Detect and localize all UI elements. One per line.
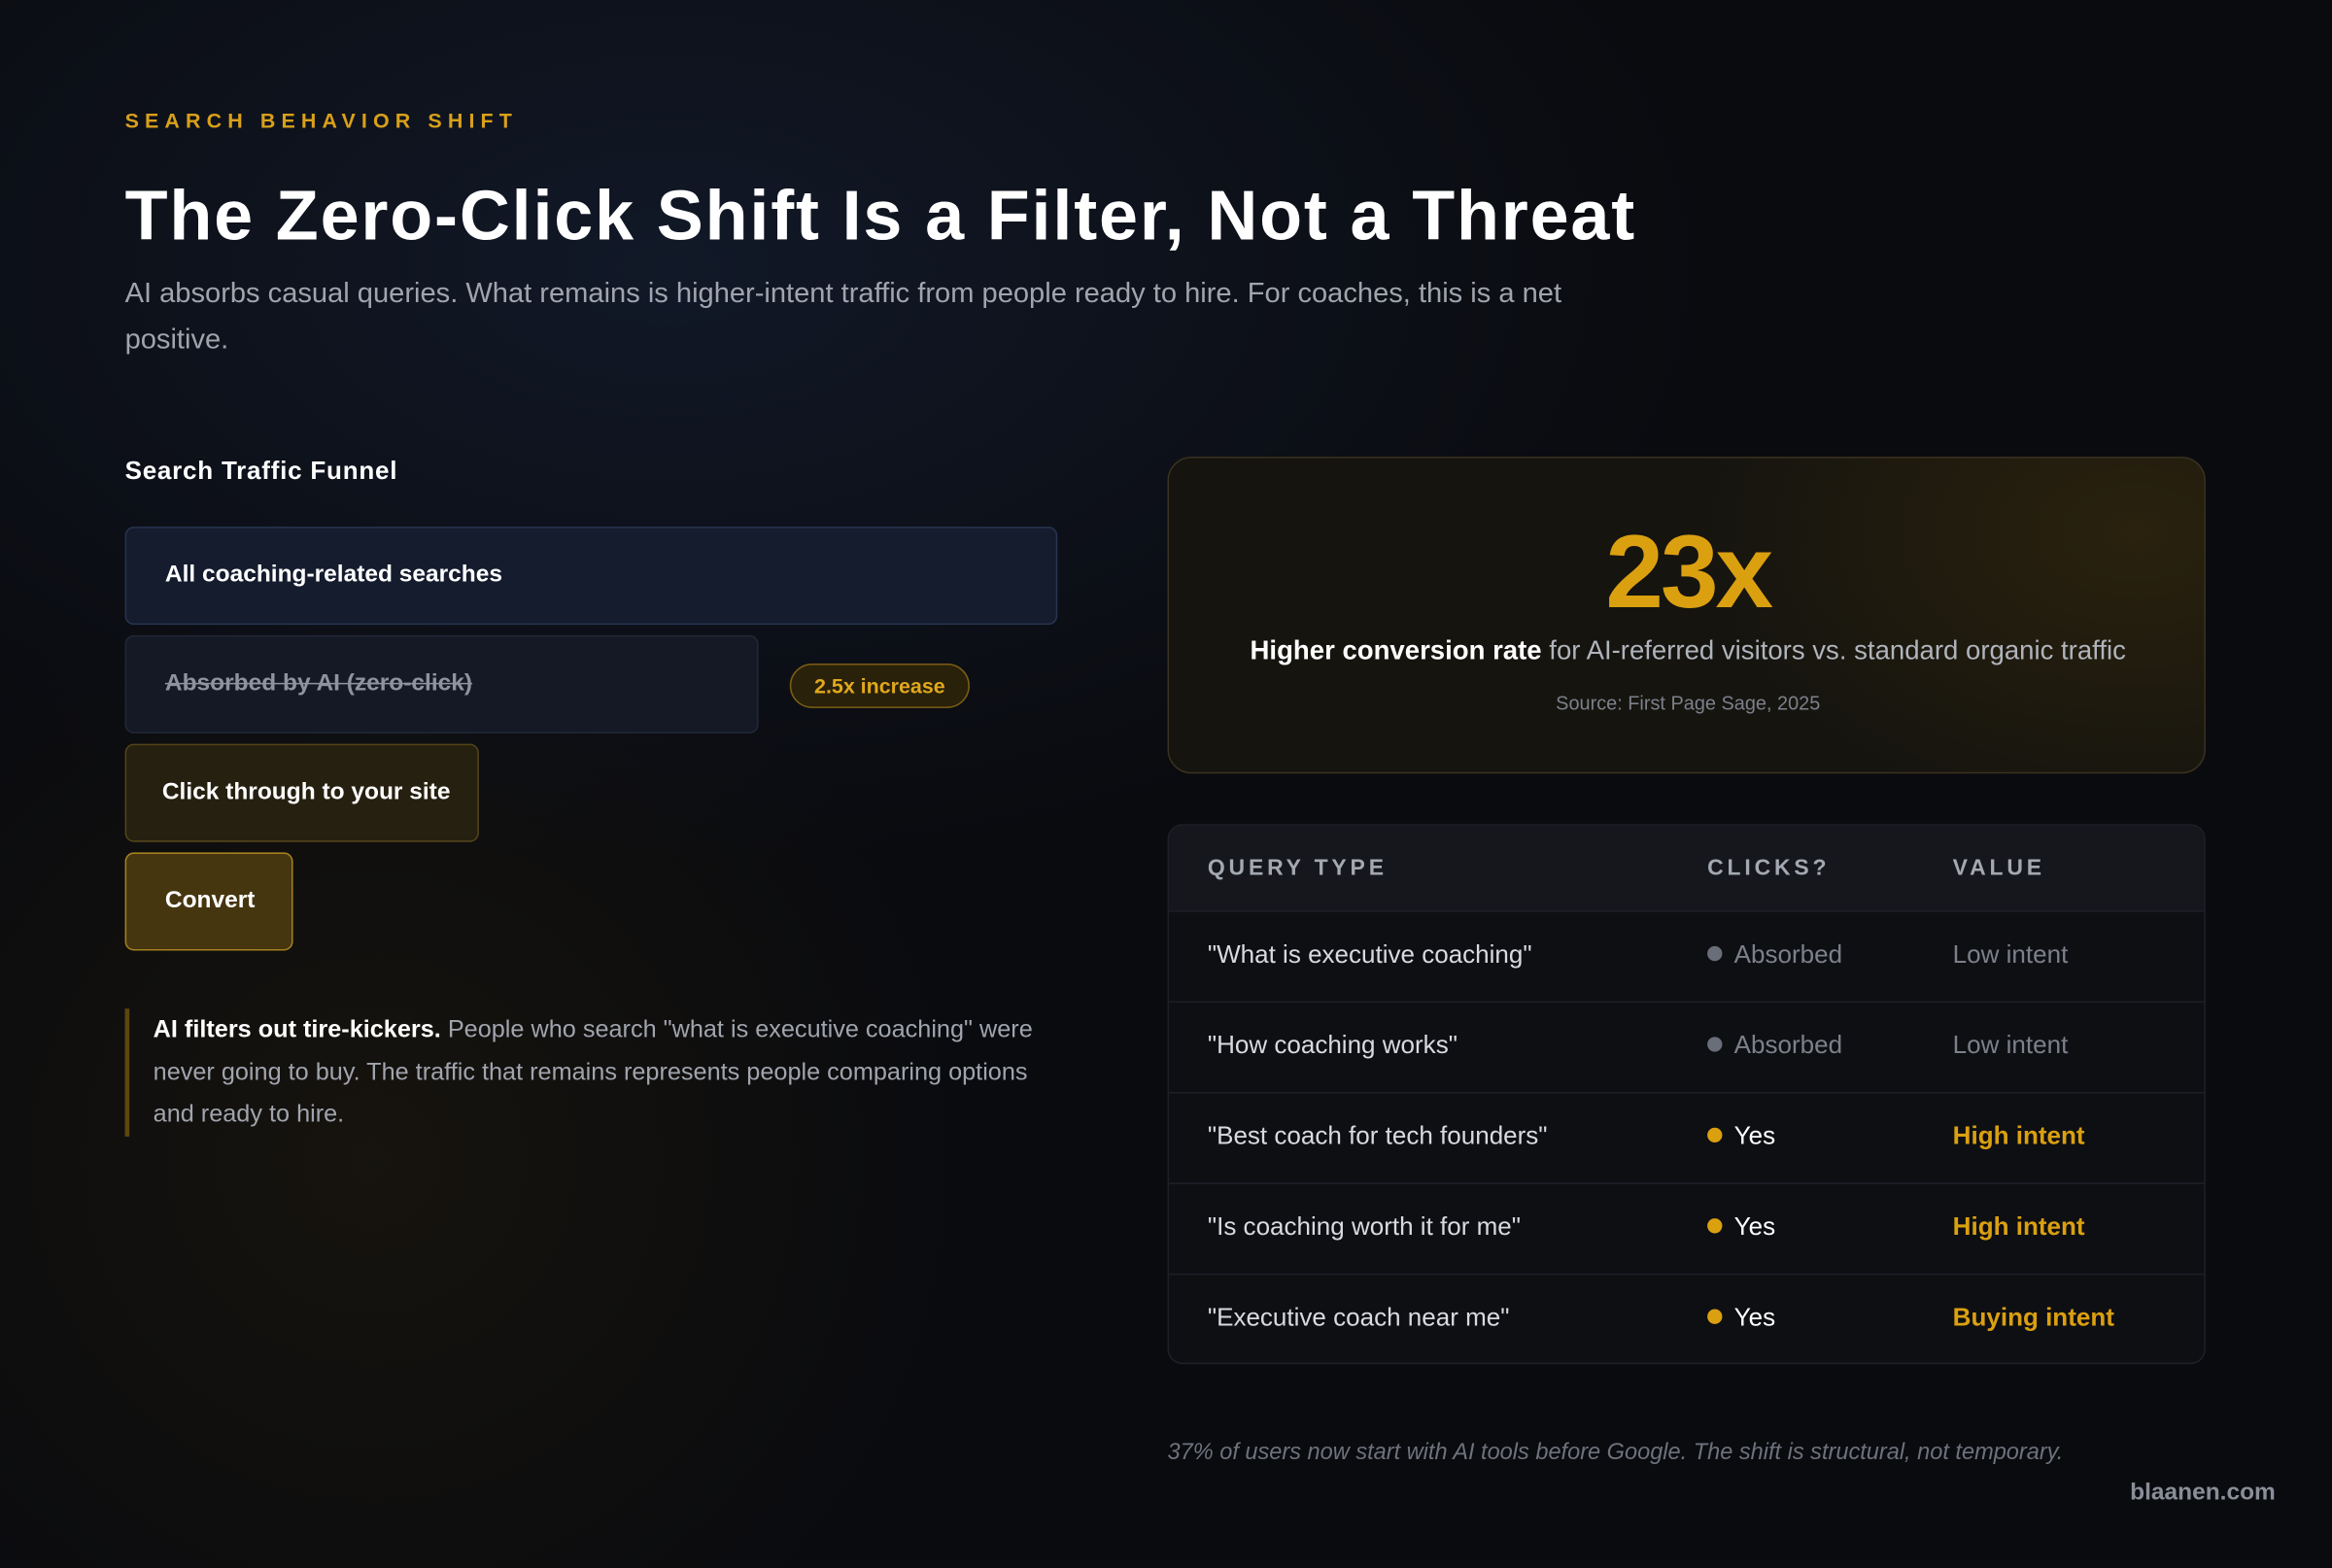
row 1: "What is executive coaching" [1208,940,1532,969]
subtitle: AI absorbs casual queries. What remains is higher-intent traffic from people ready to hire. For coaches, this is a net positive. [125,278,1561,356]
row 1 [1169,910,2207,1003]
quote callout: AI filters out tire-kickers. People who search "what is executive coaching" were never going to buy. The traffic that remains represents people comparing options and ready to hire. [154,1016,1033,1128]
bar: convert: Convert [165,888,255,913]
big number: 23x [1605,513,1770,630]
row 4 [1169,1182,2207,1275]
row 2 [1169,1002,2207,1094]
stat card [1168,457,2206,773]
table header: QUERY TYPE [1208,855,1388,881]
brand: blaanen.com [2130,1481,2276,1506]
funnel heading: Search Traffic Funnel [125,457,397,485]
stat label: Higher conversion rate for AI-referred visitors vs. standard organic traffic [1251,635,2126,665]
table header: CLICKS? [1707,855,1830,881]
eyebrow: SEARCH BEHAVIOR SHIFT [125,109,518,132]
badge [790,664,970,708]
row 4: High intent [1953,1212,2085,1241]
footer note: 37% of users now start with AI tools before Google. The shift is structural, not temporary. [1168,1440,2063,1465]
row 3: High intent [1953,1122,2085,1150]
row 1: Low intent [1953,940,2068,969]
row 3: "Best coach for tech founders" [1208,1122,1548,1150]
row 1: Absorbed [1734,940,1842,969]
source: Source: First Page Sage, 2025 [1556,692,1820,714]
row 5 [1169,1274,2207,1366]
row 2: Absorbed [1734,1031,1842,1059]
title: The Zero-Click Shift Is a Filter, Not a Threat [125,176,1636,255]
bar: click through: Click through to your site [162,779,450,804]
row 5: Buying intent [1953,1303,2114,1332]
row 2: "How coaching works" [1208,1031,1458,1059]
row 4: "Is coaching worth it for me" [1208,1212,1521,1241]
row 5: Yes [1734,1303,1775,1332]
bar: all searches: All coaching-related searches [165,562,502,588]
row 3 [1169,1092,2207,1184]
bar: click through [125,744,479,842]
row 4: Yes [1734,1212,1775,1241]
bar: convert [125,852,293,951]
table header [1169,826,2207,910]
row 3: Yes [1734,1122,1775,1150]
bar: absorbed [125,635,759,733]
bar: all searches [125,527,1057,625]
table [1168,824,2206,1364]
table header: VALUE [1953,855,2045,881]
row 2: Low intent [1953,1031,2068,1059]
badge: 2.5x increase [814,674,945,698]
row 5: "Executive coach near me" [1208,1303,1509,1332]
bar: absorbed: Absorbed by AI (zero-click) [165,671,472,697]
